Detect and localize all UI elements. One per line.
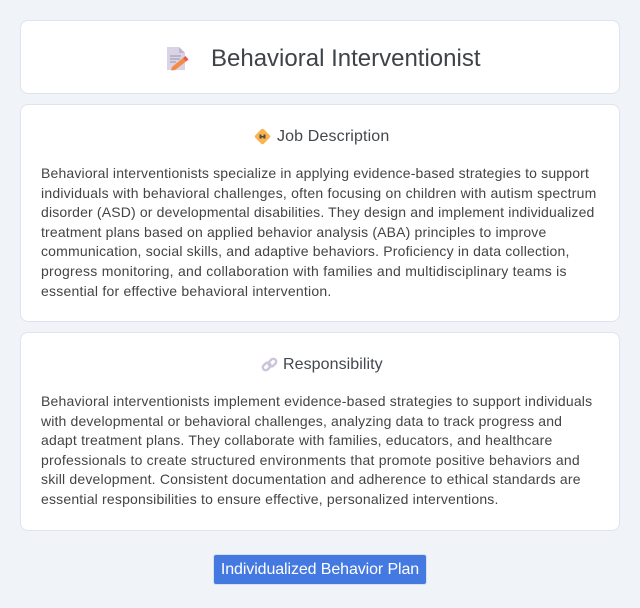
heading: Responsibility: Responsibility: [283, 356, 383, 373]
icon: chain link: [262, 358, 278, 372]
icon: document with pencil: [167, 47, 188, 70]
panel: responsibility: [20, 332, 620, 531]
button: Individualized Behavior Plan: Individualized Behavior Plan: [221, 561, 419, 578]
heading: Behavioral Interventionist: Behavioral Interventionist: [211, 45, 480, 72]
panel: title: [20, 20, 620, 94]
heading: Job Description: Job Description: [277, 128, 389, 145]
icon: diamond road sign: [254, 128, 270, 144]
text: job description body: individuals with behavioral challenges, often focusing on children with autism spectrum: [41, 185, 596, 201]
text: responsibility body: essential responsibilities to ensure effective, personalized interventions.: [41, 491, 499, 507]
text: responsibility body: skill development. Consistent documentation and adherence to ethical standards are: [41, 471, 581, 487]
text: job description body: disorder (ASD) or developmental disabilities. They design and implement individualized: [41, 204, 594, 220]
text: job description body: Behavioral interventionists specialize in applying evidence-based strategies to support: [41, 165, 589, 181]
panel: job description: [20, 104, 620, 322]
text: responsibility body: professionals to create structured environments that promote positive behaviors and: [41, 452, 580, 468]
text: responsibility body: [41, 393, 592, 507]
text: job description body: progress monitoring, and collaboration with families and multidisciplinary teams is: [41, 263, 567, 279]
text: job description body: treatment plans based on applied behavior analysis (ABA) principles to improve: [41, 224, 546, 240]
text: job description body: communication, social skills, and adaptive behaviors. Proficiency in data collection,: [41, 243, 570, 259]
text: responsibility body: Behavioral interventionists implement evidence-based strategies to support individuals: [41, 393, 592, 409]
text: job description body: [41, 165, 596, 299]
text: responsibility body: with developmental or behavioral challenges, analyzing data to track progress and: [41, 413, 562, 429]
text: job description body: essential for effective behavioral intervention.: [41, 283, 331, 299]
text: responsibility body: adapt treatment plans. They collaborate with families, educators, and healthcare: [41, 432, 552, 448]
button: Individualized Behavior Plan: [213, 554, 427, 585]
